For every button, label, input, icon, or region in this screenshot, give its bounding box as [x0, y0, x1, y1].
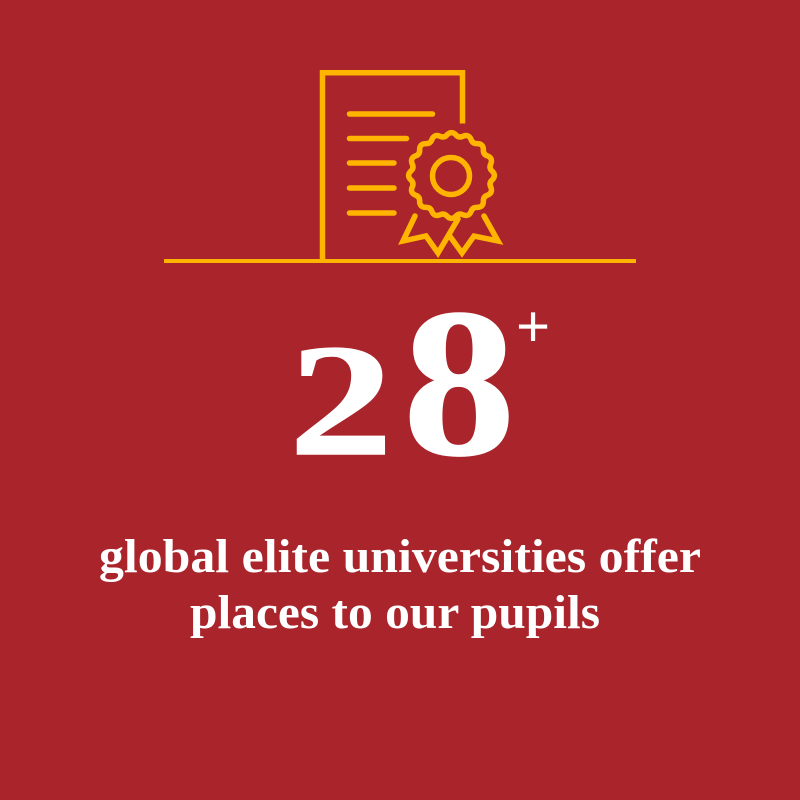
- rosette seal: [409, 133, 494, 218]
- digit 8: 8: [403, 266, 515, 501]
- baseline: [164, 259, 636, 263]
- caption line 1: global elite universities offer: [99, 530, 701, 583]
- icon: certificate with rosette: [164, 73, 636, 261]
- ribbon tails: [403, 216, 498, 253]
- plus sign: +: [516, 294, 550, 359]
- caption line 2: places to our pupils: [190, 586, 600, 639]
- digit 2: 2: [289, 313, 393, 489]
- document outline: [322, 73, 462, 261]
- statistic: 28+: [289, 266, 550, 501]
- document text lines: [350, 114, 432, 213]
- rosette centre ring: [432, 158, 470, 194]
- caption: [99, 530, 701, 639]
